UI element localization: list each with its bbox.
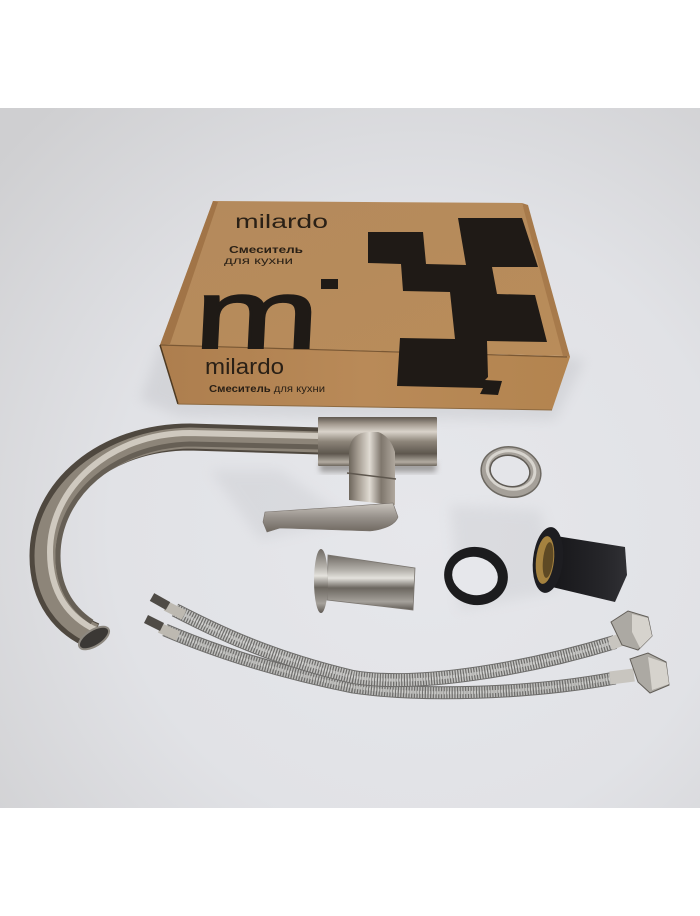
front product label: Смеситель для кухни bbox=[209, 383, 325, 395]
hose nuts bbox=[611, 611, 669, 693]
lower shadow of body bbox=[320, 462, 436, 472]
front brand name: milardo bbox=[205, 354, 284, 379]
big m logo: m bbox=[192, 259, 322, 369]
faucet bbox=[43, 417, 437, 654]
soft shadows on surface bbox=[140, 345, 585, 610]
lower hose bbox=[146, 619, 634, 693]
cardboard box bbox=[160, 201, 570, 410]
small square bbox=[321, 279, 338, 289]
black pattern bbox=[368, 218, 547, 395]
braided hoses bbox=[146, 597, 634, 693]
black plastic fitting bbox=[530, 526, 627, 602]
aerator tip bbox=[75, 622, 113, 654]
lever handle bbox=[263, 503, 398, 532]
top product title: Смеситель bbox=[229, 244, 304, 256]
spout bbox=[43, 433, 320, 636]
box flaps bbox=[160, 201, 218, 345]
vertical stem bbox=[349, 432, 395, 505]
upper hose bbox=[152, 597, 630, 680]
box top face bbox=[160, 201, 570, 357]
threaded stud bbox=[314, 549, 415, 613]
horizontal body bbox=[318, 417, 437, 466]
black rubber washer bbox=[439, 541, 513, 611]
top brand name: milardo bbox=[235, 212, 328, 233]
metal ring bbox=[476, 441, 546, 503]
box front face bbox=[160, 345, 570, 410]
photo background bbox=[0, 108, 700, 808]
top product subtitle: для кухни bbox=[224, 256, 293, 267]
